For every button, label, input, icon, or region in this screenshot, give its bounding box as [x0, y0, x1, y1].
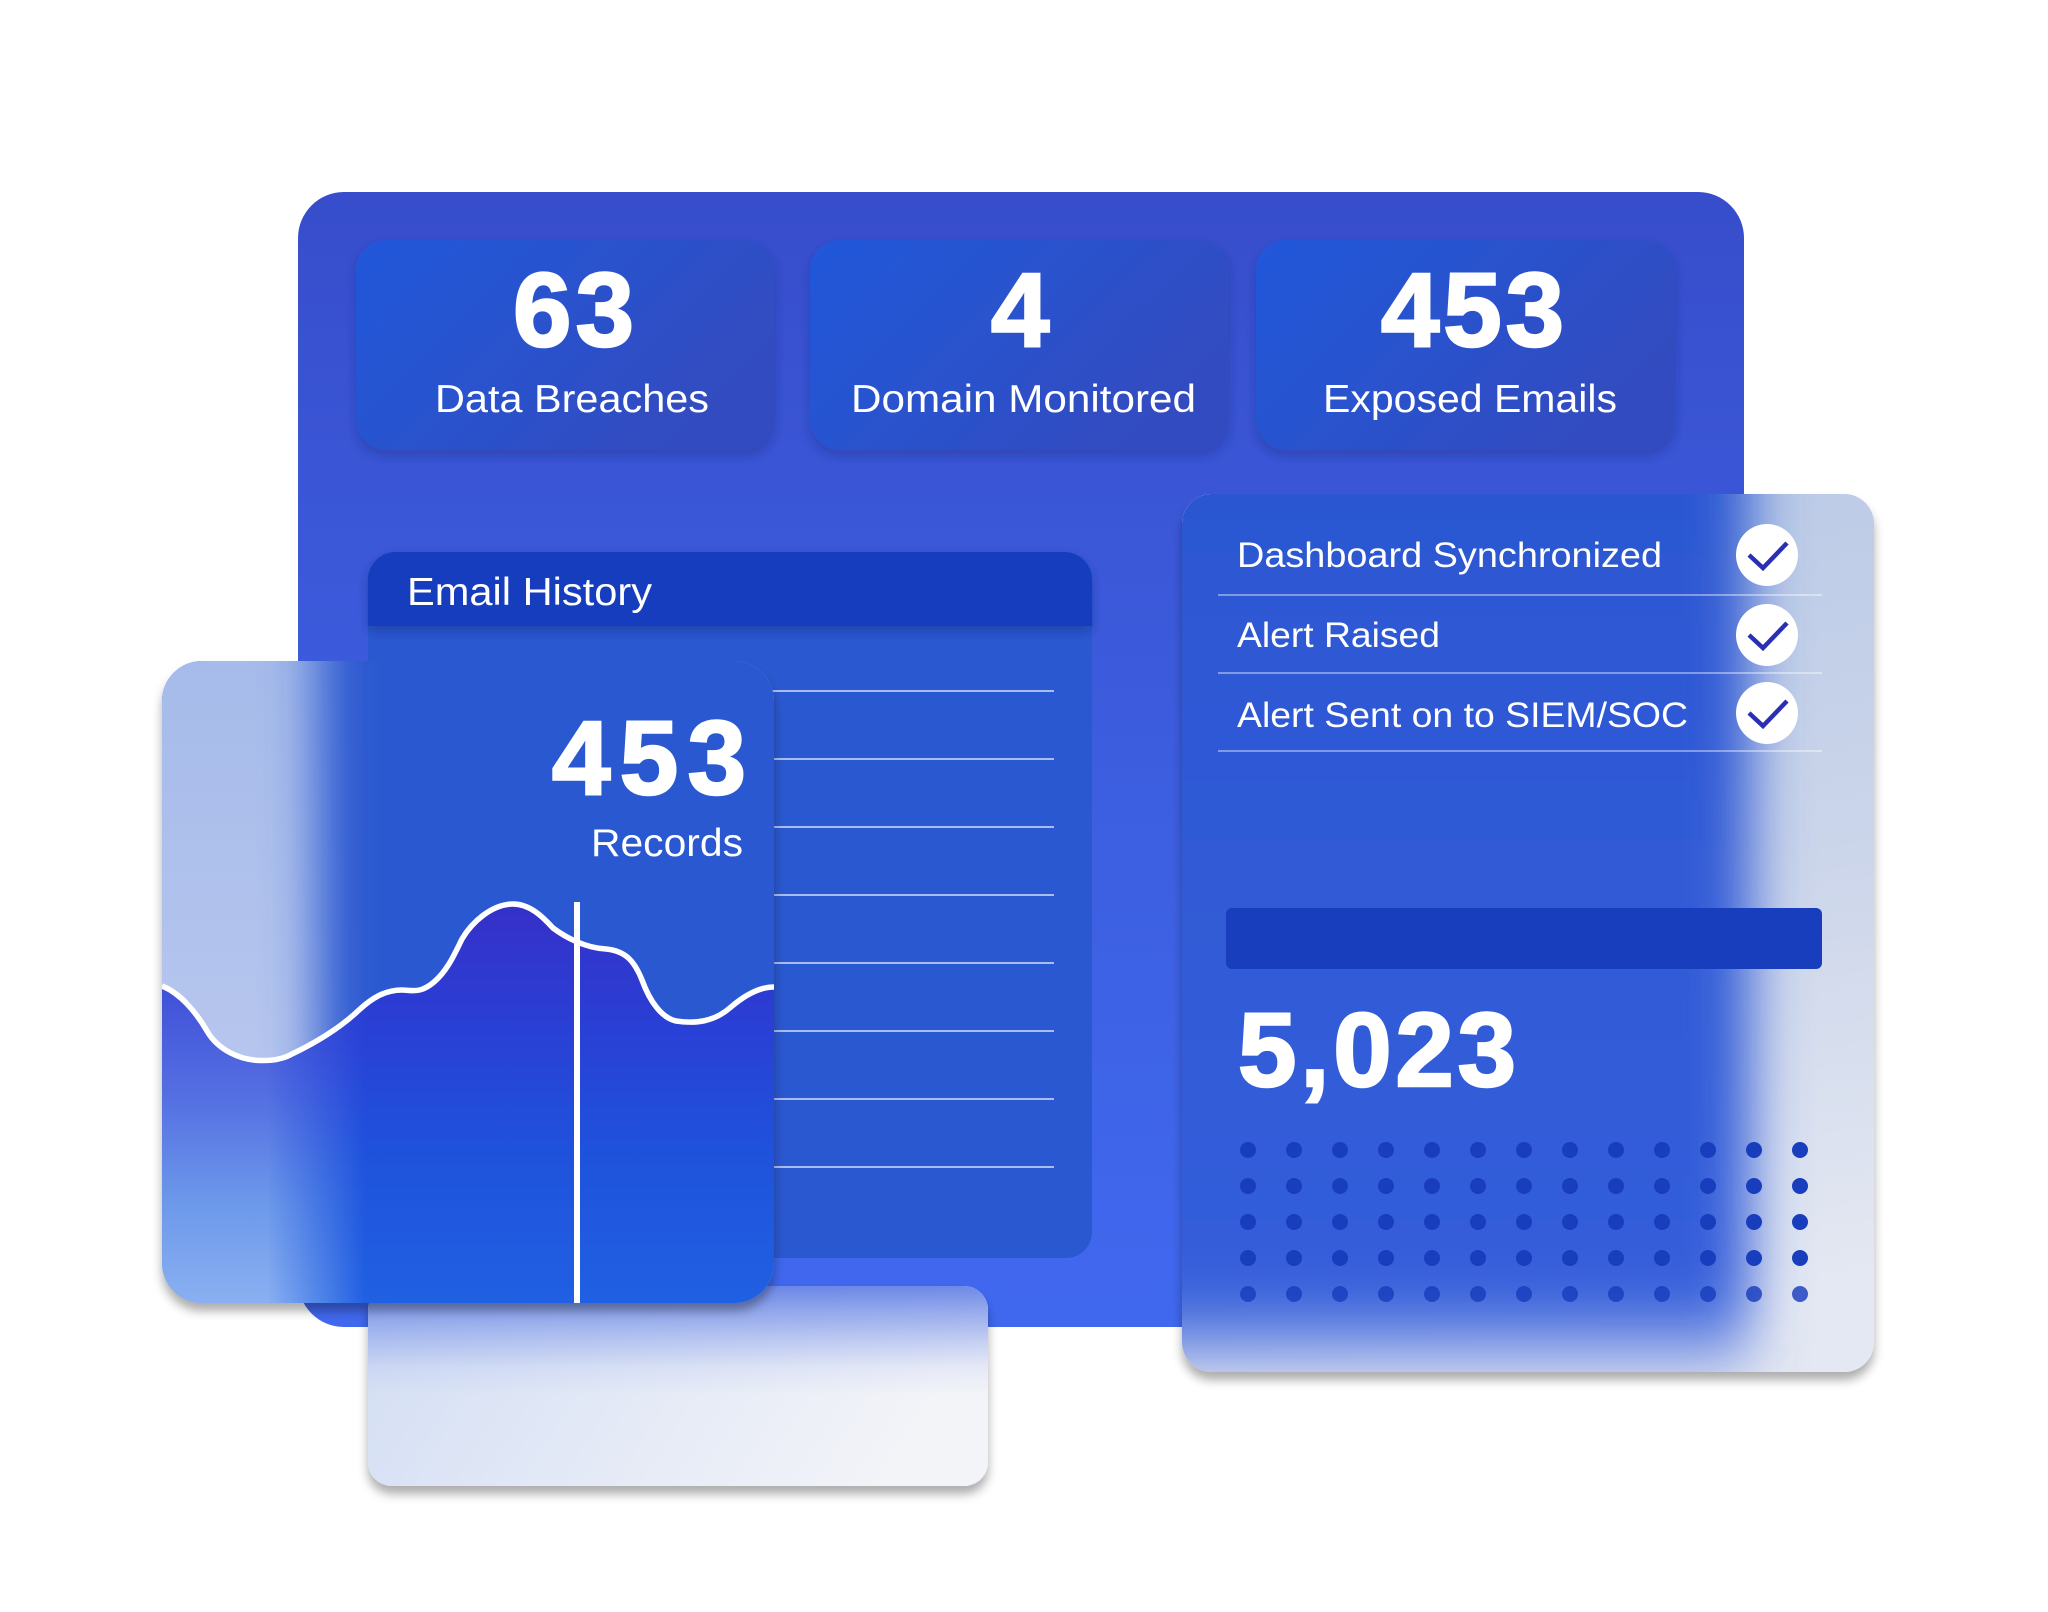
email history header: [368, 552, 1092, 626]
status row: alert sent: [1218, 682, 1822, 752]
stat card: domain monitored: Domain Monitored: [851, 378, 1196, 421]
stat card: exposed emails: [1256, 240, 1675, 450]
panel: email history: [368, 552, 1092, 1258]
stat card: data breaches: Data Breaches: [435, 378, 709, 421]
status row: alert raised: [1218, 604, 1822, 674]
dashboard illustration: [156, 192, 1880, 1500]
stat card: domain monitored: 4: [991, 252, 1049, 369]
main dashboard panel: [298, 192, 1744, 1327]
stat card: exposed emails: Exposed Emails: [1323, 378, 1617, 421]
area chart: [162, 902, 774, 1303]
status row: alert sent: Alert Sent on to SIEM/SOC: [1237, 696, 1688, 735]
stat card: data breaches: 63: [513, 252, 634, 369]
email history header: Email History: [407, 571, 653, 614]
stat card: exposed emails: 453: [1381, 252, 1564, 369]
stat card: domain monitored: [810, 240, 1229, 450]
status row: dashboard synchronized: Dashboard Synchronized: [1237, 536, 1662, 575]
total count: 5,023: [1238, 992, 1516, 1109]
status row: dashboard synchronized: [1218, 524, 1822, 596]
dot matrix: [1240, 1142, 1808, 1302]
status and totals card: [1176, 494, 1880, 1386]
status row: alert raised: Alert Raised: [1237, 616, 1440, 655]
dark bar: [1226, 908, 1822, 969]
records label: Records: [591, 822, 743, 865]
records chart card: [156, 661, 780, 1317]
empty frosted card: [368, 1286, 988, 1486]
records count: 453: [552, 700, 746, 817]
stat card: data breaches: [356, 240, 775, 450]
